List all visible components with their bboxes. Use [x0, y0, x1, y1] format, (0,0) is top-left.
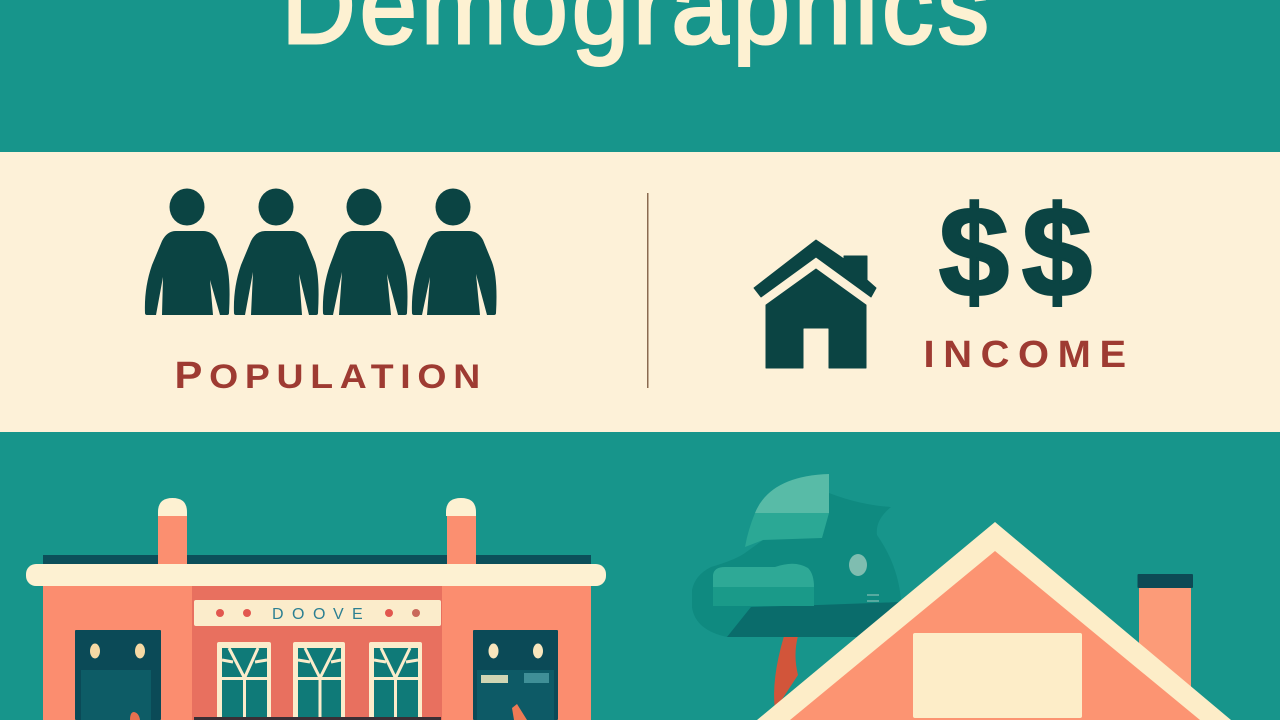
right chimney	[446, 498, 476, 565]
icon: house	[754, 240, 876, 368]
central facade	[192, 586, 442, 720]
divider	[647, 193, 648, 388]
roof strip	[43, 555, 591, 565]
illustration: tree	[692, 474, 901, 710]
foliage shadow	[727, 602, 901, 637]
population icon: four people	[145, 188, 496, 315]
illustration: house	[757, 522, 1231, 720]
illustration: shop building	[26, 498, 606, 720]
gable window	[913, 633, 1082, 718]
roof outline	[757, 522, 1231, 720]
icon: dollar signs: $	[1022, 180, 1092, 323]
foliage middle highlight	[745, 513, 829, 547]
foliage spot	[849, 554, 867, 576]
left door	[75, 630, 161, 720]
right door	[473, 630, 558, 720]
cornice	[26, 564, 606, 586]
foliage lower highlight	[713, 564, 814, 587]
balcony railing	[194, 717, 441, 720]
foliage lower band	[713, 587, 814, 606]
foliage top highlight	[755, 474, 829, 513]
building wall	[43, 584, 591, 720]
person 2	[234, 188, 319, 315]
window 3	[369, 642, 422, 720]
person 1	[145, 188, 230, 315]
tree trunk	[774, 636, 798, 710]
panel: stats band	[0, 152, 1280, 432]
shop sign: DOOVE	[272, 606, 363, 623]
foliage main	[692, 493, 901, 637]
foliage marks	[867, 595, 879, 601]
house chimney	[1138, 574, 1193, 696]
population label: POPULATION	[174, 355, 487, 397]
person 4	[412, 188, 496, 315]
icon: dollar signs: $	[939, 180, 1009, 323]
person 3	[323, 188, 408, 315]
gable wall	[790, 551, 1200, 720]
left chimney	[158, 498, 187, 565]
shop sign	[194, 600, 441, 626]
income label: INCOME	[924, 334, 1135, 376]
window 1	[217, 642, 271, 720]
icon: dollar signs	[939, 180, 1092, 323]
window 2	[293, 642, 345, 720]
